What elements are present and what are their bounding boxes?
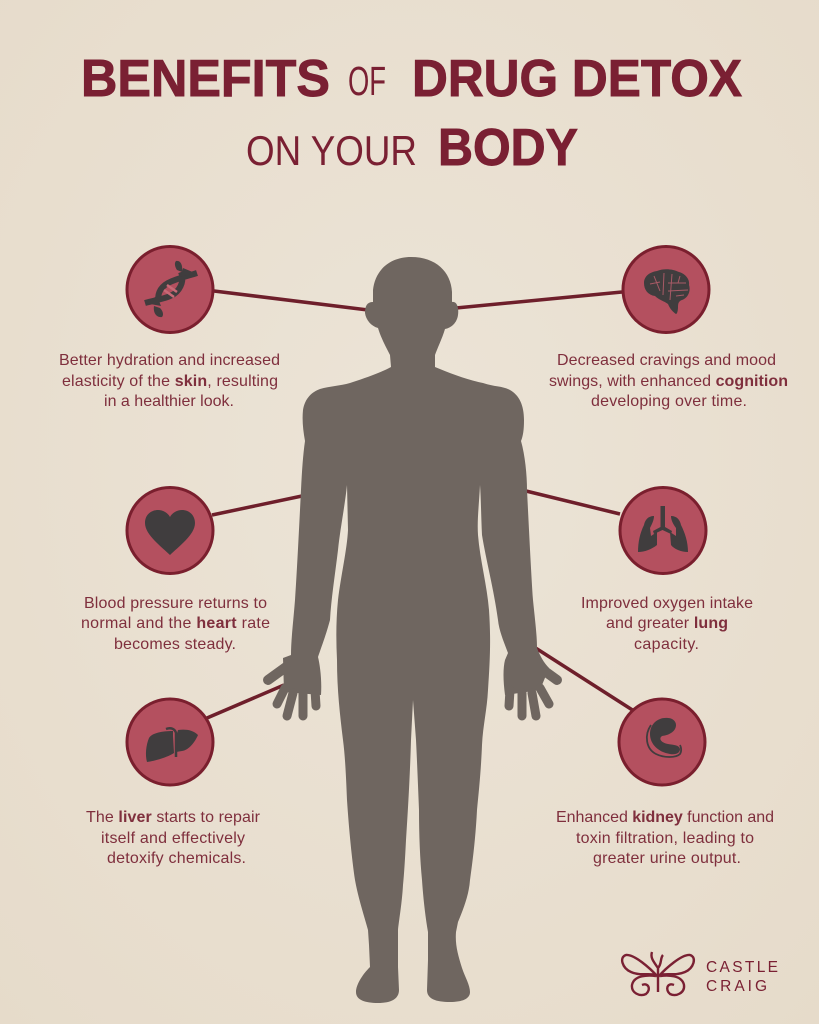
- title: [81, 50, 742, 177]
- text: kidney: Enhanced kidney function and: [556, 809, 774, 826]
- panel: lungs: [581, 488, 753, 653]
- text: heart: Blood pressure returns to: [84, 595, 267, 612]
- text: lungs: capacity.: [634, 636, 699, 653]
- panel: kidney: [556, 699, 774, 867]
- text: lungs: and greater lung: [606, 615, 728, 632]
- connector lines: [207, 291, 634, 718]
- text: liver: detoxify chemicals.: [107, 850, 246, 867]
- title: DRUG DETOX: [412, 50, 742, 108]
- icon: heart: [127, 488, 213, 574]
- text: cognition: swings, with enhanced cognition: [549, 373, 788, 390]
- body silhouette: [268, 257, 557, 1003]
- panel: skin: [59, 246, 280, 410]
- text: cognition: Decreased cravings and mood: [557, 352, 776, 369]
- title: BENEFITS: [81, 50, 330, 108]
- text: skin: elasticity of the skin, resulting: [62, 373, 278, 390]
- icon: brain: [623, 246, 709, 332]
- icon: kidney: [619, 699, 705, 785]
- text: skin: in a healthier look.: [104, 393, 234, 410]
- text: liver: The liver starts to repair: [86, 809, 261, 826]
- icon: liver: [127, 699, 213, 785]
- text: kidney: [556, 809, 774, 867]
- text: cognition: developing over time.: [591, 393, 747, 410]
- title: OF: [348, 58, 386, 104]
- logo wordmark: [706, 959, 778, 995]
- panel: cognition: [549, 246, 788, 410]
- icon: dna: [127, 246, 213, 332]
- text: kidney: toxin filtration, leading to: [576, 830, 754, 847]
- text: liver: itself and effectively: [101, 830, 245, 847]
- icon: lungs: [620, 488, 706, 574]
- text: lungs: [581, 595, 753, 653]
- logo: Castle Craig: [622, 952, 778, 995]
- panel: liver: [86, 699, 261, 867]
- text: kidney: greater urine output.: [593, 850, 741, 867]
- text: skin: [59, 352, 280, 410]
- title: BODY: [438, 119, 578, 177]
- text: skin: Better hydration and increased: [59, 352, 280, 369]
- logo wordmark: CRAIG: [706, 978, 767, 995]
- panel: heart: [81, 488, 270, 653]
- text: heart: becomes steady.: [114, 636, 236, 653]
- title: ON YOUR: [246, 127, 417, 174]
- logo wordmark: CASTLE: [706, 959, 778, 976]
- text: heart: normal and the heart rate: [81, 615, 270, 632]
- text: liver: [86, 809, 261, 867]
- text: lungs: Improved oxygen intake: [581, 595, 753, 612]
- text: cognition: [549, 352, 788, 410]
- icon: butterfly: [622, 952, 694, 995]
- text: heart: [81, 595, 270, 653]
